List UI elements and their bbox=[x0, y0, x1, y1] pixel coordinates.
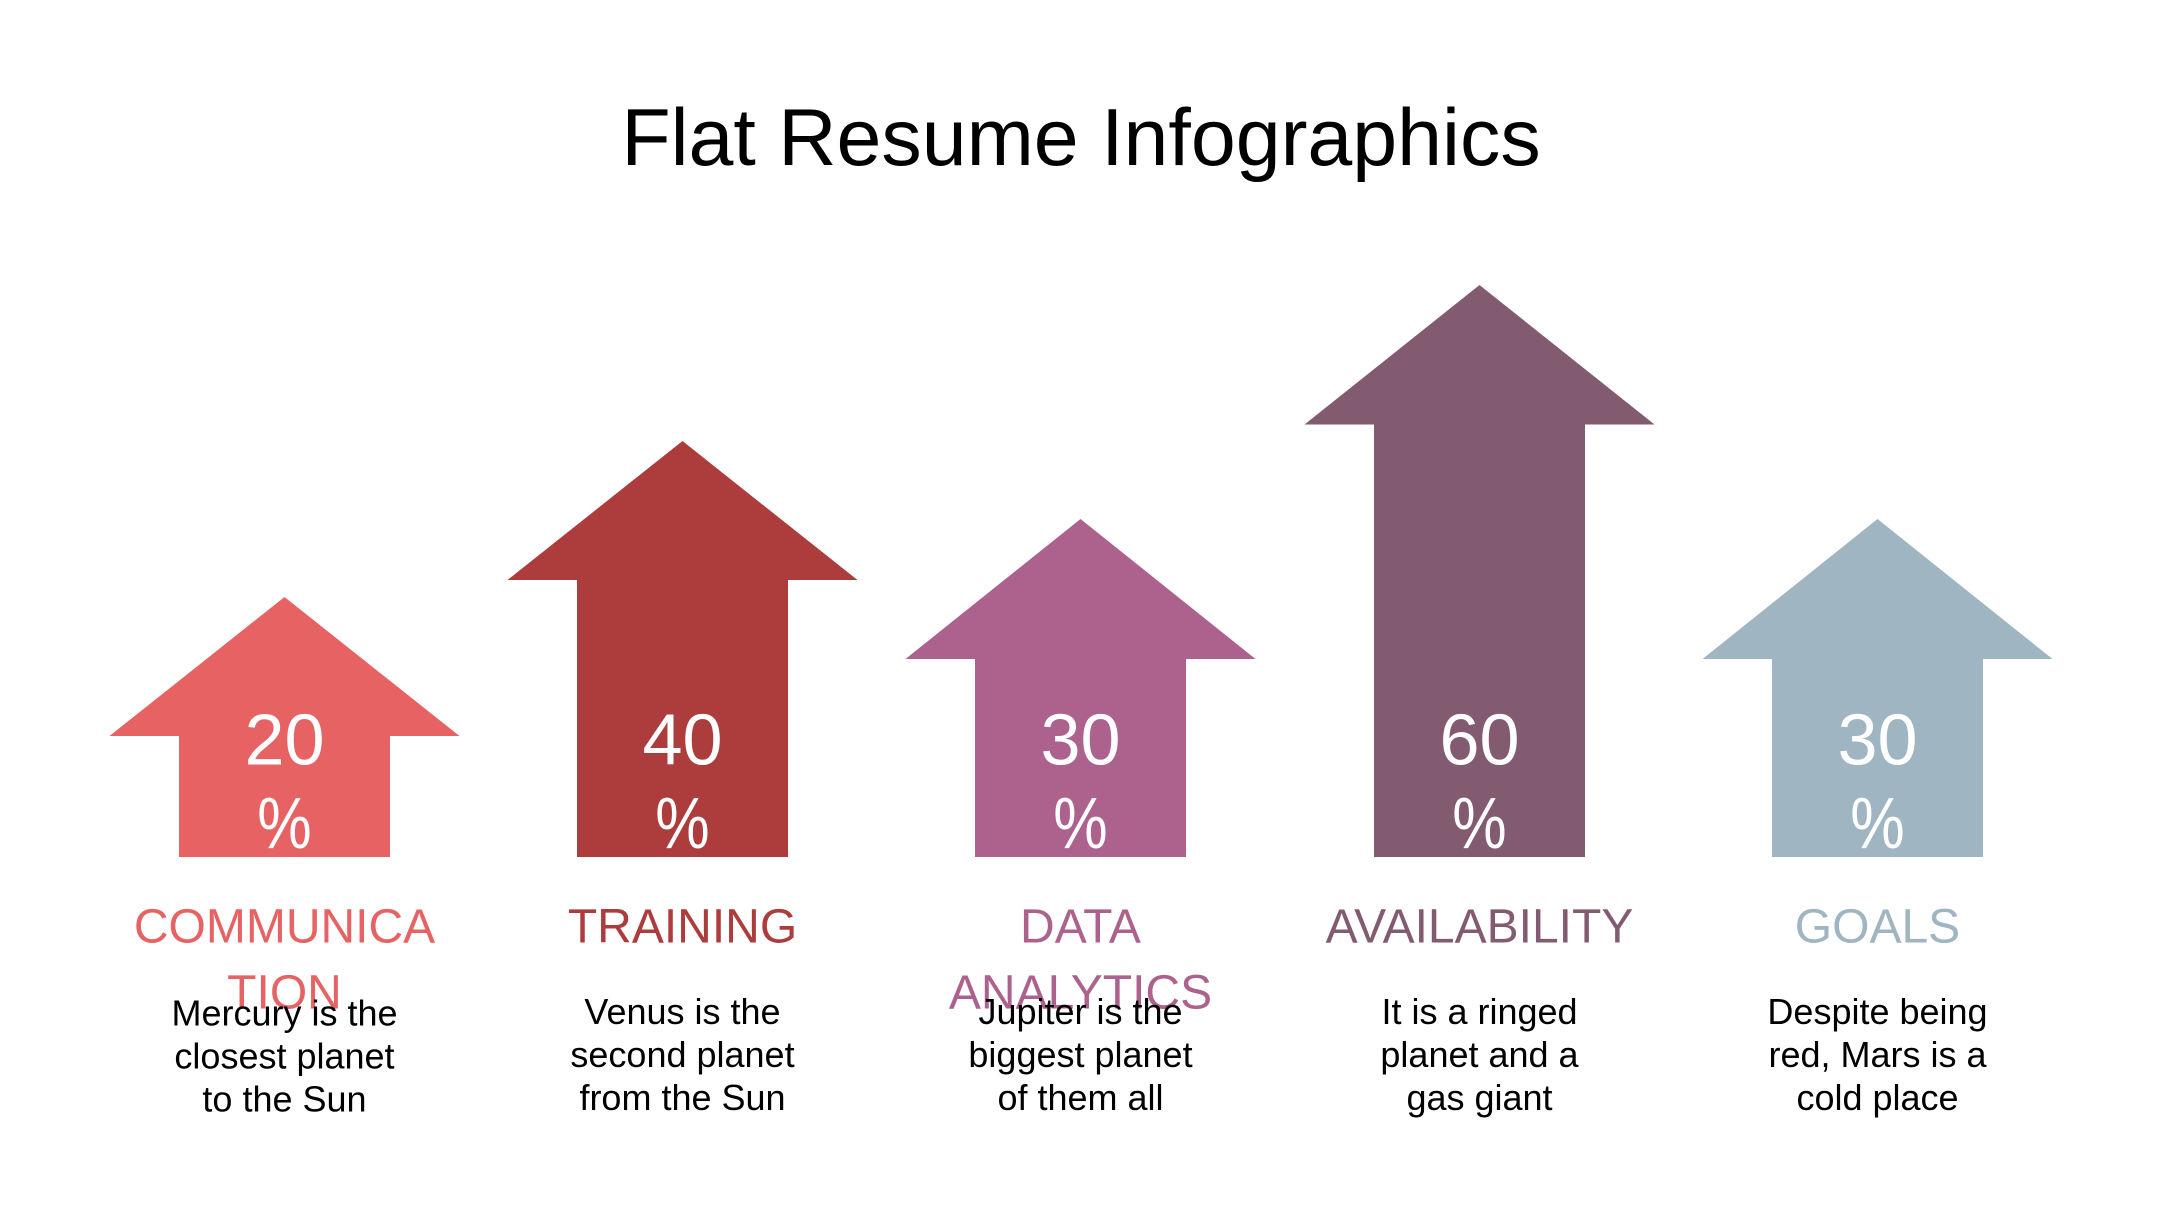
value: 20%: % bbox=[257, 784, 312, 864]
arrow: data analytics bbox=[906, 519, 1256, 857]
label: availability: AVAILABILITY bbox=[1326, 900, 1633, 954]
value: 30%: 30 bbox=[1040, 700, 1121, 780]
value: 40%: % bbox=[655, 784, 710, 864]
description: goals: red, Mars is a bbox=[1768, 1034, 1988, 1075]
label: data analytics: ANALYTICS bbox=[949, 966, 1212, 1020]
value: 60%: 60 bbox=[1439, 700, 1520, 780]
description: communication: closest planet bbox=[174, 1036, 395, 1076]
description: training: from the Sun bbox=[579, 1077, 786, 1118]
description: goals: cold place bbox=[1796, 1077, 1959, 1118]
description: availability: gas giant bbox=[1406, 1077, 1553, 1118]
description: goals: Despite being bbox=[1767, 991, 1988, 1032]
title: Flat Resume Infographics bbox=[621, 93, 1541, 183]
panel: data analytics bbox=[906, 519, 1256, 1118]
description: data analytics: Jupiter is the bbox=[978, 991, 1183, 1032]
value: 60%: % bbox=[1452, 784, 1507, 864]
description: availability: planet and a bbox=[1380, 1034, 1580, 1075]
panel: communication bbox=[110, 597, 460, 1120]
value: 20%: 20 bbox=[244, 700, 325, 780]
value: 40% bbox=[642, 700, 723, 864]
description: training: Venus is the bbox=[584, 991, 781, 1032]
description: availability: It is a ringed bbox=[1381, 991, 1578, 1032]
description: communication: Mercury is the bbox=[171, 992, 398, 1034]
panel: availability bbox=[1304, 285, 1654, 1118]
arrow: training bbox=[508, 441, 858, 857]
value: 40%: 40 bbox=[642, 700, 723, 780]
panel: goals bbox=[1702, 519, 2052, 1118]
label: data analytics: DATA bbox=[1020, 900, 1141, 954]
description: data analytics: of them all bbox=[997, 1077, 1164, 1118]
value: 30%: 30 bbox=[1837, 700, 1918, 780]
value: 30%: % bbox=[1850, 784, 1905, 864]
label: goals: GOALS bbox=[1795, 900, 1960, 954]
value: 30%: % bbox=[1053, 784, 1108, 864]
value: 30% bbox=[1837, 700, 1918, 864]
value: 60% bbox=[1439, 700, 1520, 864]
arrow: communication bbox=[110, 597, 460, 857]
value: 20% bbox=[244, 700, 325, 864]
label: training: TRAINING bbox=[568, 900, 797, 954]
arrow: goals bbox=[1702, 519, 2052, 857]
value: 30% bbox=[1040, 700, 1121, 864]
label: communication: TION bbox=[227, 966, 342, 1020]
description: communication: to the Sun bbox=[202, 1078, 367, 1120]
arrow: availability bbox=[1304, 285, 1654, 857]
description: data analytics: biggest planet bbox=[968, 1034, 1193, 1075]
label: communication: COMMUNICA bbox=[134, 900, 435, 954]
panel: training bbox=[508, 441, 858, 1118]
description: training: second planet bbox=[570, 1034, 795, 1075]
